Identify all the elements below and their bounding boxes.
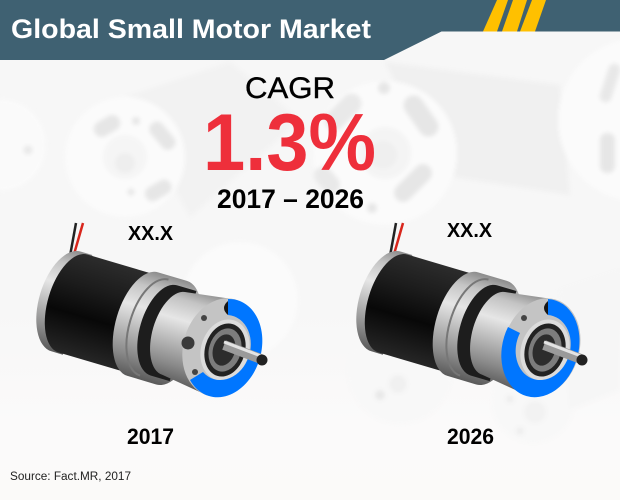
period: 2017 – 2026: [217, 184, 364, 214]
source note: Source: Fact.MR, 2017: [10, 471, 131, 483]
value label 2026: XX.X: [447, 219, 492, 242]
motor 2017 with blue ring: [25, 223, 273, 410]
blue ring segment: [190, 299, 262, 397]
value label 2017: XX.X: [128, 222, 173, 245]
header banner: [0, 0, 620, 60]
title: Global Small Motor Market: [11, 14, 371, 44]
year label 2017: 2017: [127, 424, 174, 449]
CAGR label: CAGR: [245, 72, 335, 105]
blue ring segment: [501, 299, 580, 397]
year label 2026: 2026: [447, 424, 494, 449]
motor 2026 with blue ring: [345, 223, 593, 410]
icon: yellow stripes: [483, 0, 546, 32]
CAGR value: 1.3%: [203, 98, 376, 188]
